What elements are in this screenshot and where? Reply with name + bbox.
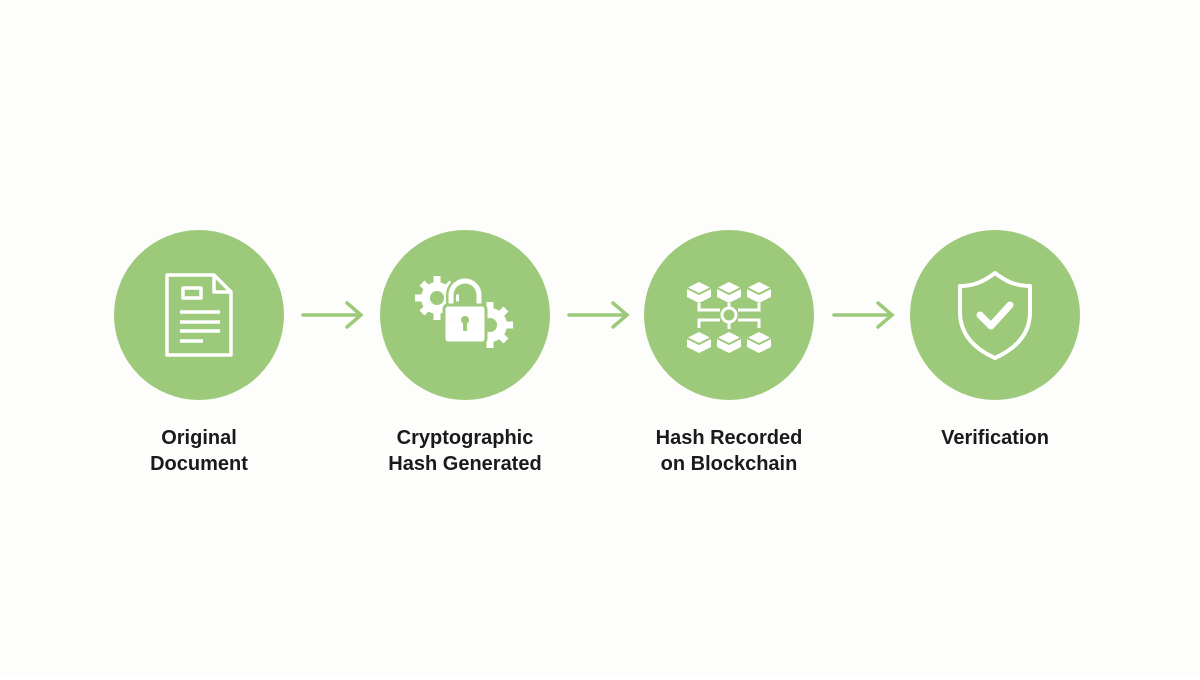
circle 1 (114, 230, 284, 400)
circle 4 (910, 230, 1080, 400)
arrow 3 (834, 303, 892, 327)
label 3: Hash Recorded (656, 427, 802, 449)
icon: blockchain network (687, 282, 771, 353)
labels (150, 427, 1049, 475)
step 2: hash generated (380, 230, 550, 400)
label 3: on Blockchain (661, 453, 797, 475)
icon: document (167, 275, 231, 355)
step 1: original document (114, 230, 284, 400)
icon: gears and lock (415, 276, 513, 348)
label 2: Hash Generated (388, 453, 542, 475)
circle 3 (644, 230, 814, 400)
step 4: verification (910, 230, 1080, 400)
label 2: Cryptographic (397, 427, 533, 449)
icon: shield check (960, 273, 1030, 358)
step 3: blockchain (644, 230, 814, 400)
label 1: Document (150, 453, 248, 475)
label 1: Original (161, 427, 237, 449)
label 4: Verification (941, 427, 1049, 449)
circle 2 (380, 230, 550, 400)
arrow 2 (569, 303, 627, 327)
arrow 1 (303, 303, 361, 327)
